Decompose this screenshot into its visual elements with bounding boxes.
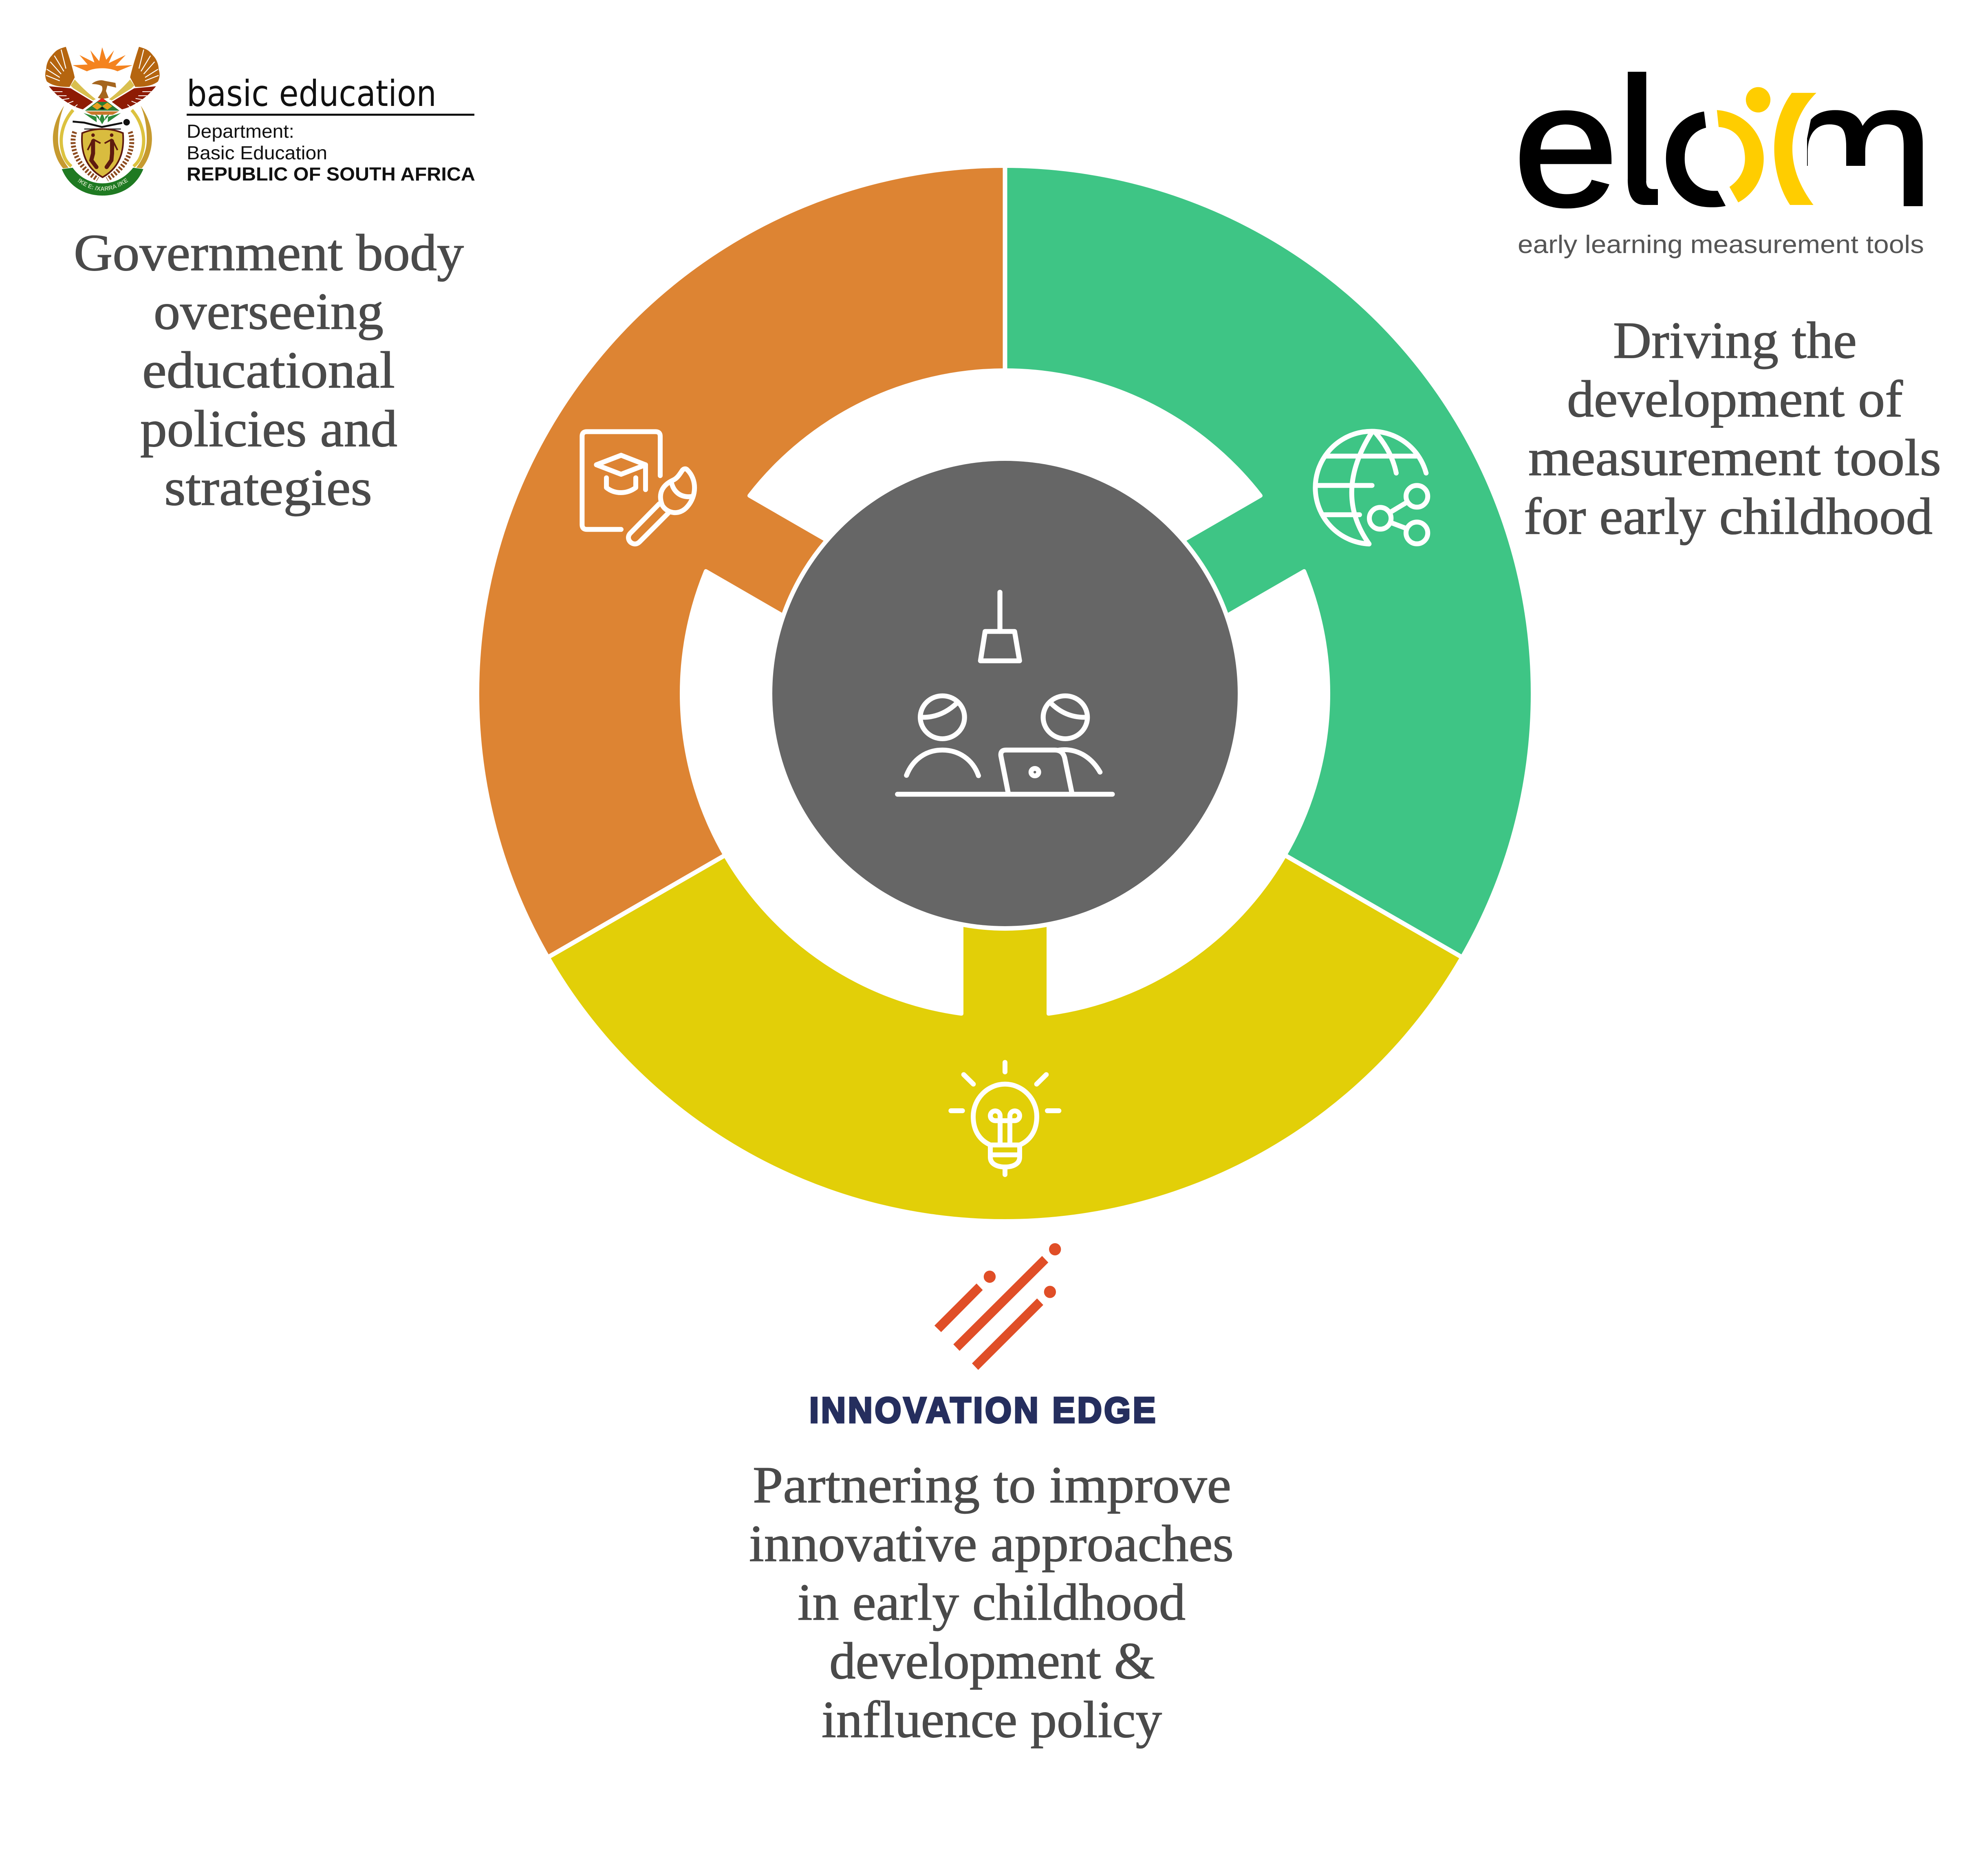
motto ribbon	[62, 168, 143, 196]
department line: Department:	[187, 121, 294, 142]
spear and knobkerrie	[73, 121, 122, 127]
letter m: m	[1777, 48, 1934, 242]
stylised o	[1666, 87, 1816, 207]
text block: government description: overseeing	[154, 282, 383, 340]
logo: innovation edge	[809, 1243, 1158, 1430]
text block: innovation edge description: Partnering to improve	[753, 1456, 1231, 1514]
text block: innovation edge description: in early childhood	[798, 1573, 1186, 1631]
logo: South African coat of arms	[45, 47, 160, 196]
shield	[82, 129, 123, 177]
text block: government description	[74, 224, 464, 516]
segment: green	[918, 36, 1688, 1006]
icon: centre meeting people with laptop	[897, 592, 1112, 794]
text block: innovation edge description: development &	[829, 1632, 1155, 1690]
protea pyramid	[85, 98, 119, 111]
text block: innovation edge description	[749, 1456, 1234, 1748]
leaves	[84, 113, 121, 124]
centre circle	[772, 461, 1238, 926]
text block: government description: educational	[142, 341, 395, 399]
text block: government description: policies and	[140, 400, 397, 458]
donut diagram	[322, 36, 1688, 1219]
segment: orange	[322, 36, 1092, 1006]
left wing and tusk	[45, 47, 98, 179]
logo: elom	[1519, 72, 1923, 258]
text block: elom description: Driving the	[1613, 311, 1857, 369]
motto text: !KE E: /XARRA //KE	[76, 177, 130, 192]
text block: elom description: for early childhood	[1524, 487, 1933, 545]
logo: basic education wordmark	[187, 73, 475, 185]
text block: innovation edge description: influence policy	[822, 1691, 1162, 1748]
wordmark: basic education	[187, 73, 436, 114]
secretary bird head	[92, 80, 116, 99]
letter l: l	[1617, 40, 1657, 244]
text block: government description: Government body	[74, 224, 464, 282]
text block: elom description: development of	[1567, 370, 1903, 428]
country: REPUBLIC OF SOUTH AFRICA	[187, 163, 475, 185]
sun	[73, 47, 132, 71]
segment: yellow	[550, 856, 1460, 1219]
figures on shield	[91, 141, 112, 167]
icon: light bulb	[951, 1062, 1059, 1175]
text block: innovation edge description: innovative approaches	[749, 1515, 1234, 1572]
mark	[934, 1243, 1061, 1370]
department name: Basic Education	[187, 142, 327, 163]
right wing and tusk	[107, 47, 160, 179]
text block: elom description: measurement tools	[1528, 429, 1941, 487]
letter e: e	[1513, 48, 1618, 242]
text block: government description: strategies	[164, 458, 372, 516]
icon: globe with share nodes	[1315, 431, 1428, 544]
wordmark: INNOVATION EDGE	[809, 1390, 1158, 1430]
text block: elom description	[1524, 311, 1941, 545]
tagline: early learning measurement tools	[1518, 231, 1924, 259]
icon: document, graduation cap and paintbrush	[582, 432, 694, 544]
